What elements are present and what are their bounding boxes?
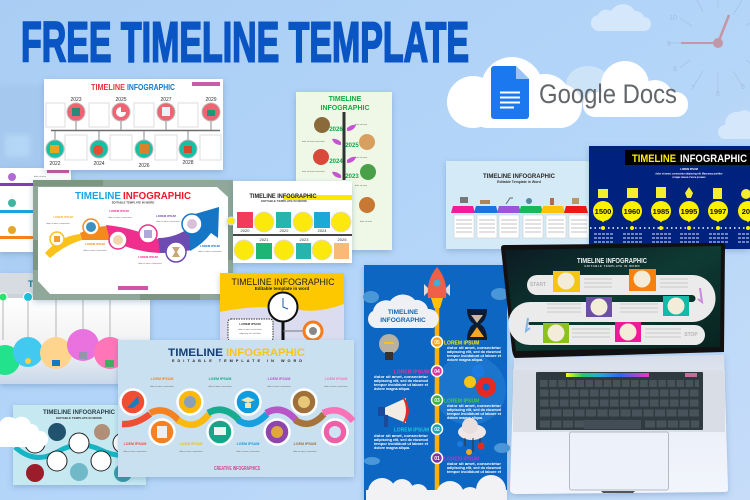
years: 2025 (345, 143, 359, 149)
dashed text box: dolor sit amet, consectetur (238, 328, 262, 331)
note boxes (454, 215, 589, 238)
years: 2029 (205, 97, 217, 103)
years: 2023 (70, 97, 82, 103)
screen cards (543, 269, 689, 343)
labels: LOREM IPSUM (444, 340, 479, 346)
intro: LOREM IPSUM (680, 168, 698, 171)
axis nodes (601, 226, 750, 230)
heading: TIMELINE INFOGRAPHIC (250, 194, 317, 200)
panel: hanging circles timeline: TI (28, 279, 36, 289)
rocket spine (435, 306, 439, 490)
blurred left patch (0, 85, 43, 270)
labels: LOREM IPSUM (394, 428, 429, 434)
copy: dolor sit amet, consectetur (179, 450, 203, 453)
copy: tempor incididunt ut labore et (447, 412, 502, 416)
laptop base (510, 355, 728, 494)
icons (460, 197, 579, 205)
heading: TIMELINE INFOGRAPHIC (483, 174, 556, 180)
labels: LOREM IPSUM (156, 214, 177, 218)
heading: TIMELINE (632, 153, 676, 165)
panel: wave timeline card: EDITABLE TEMPLATE IN WORD (56, 416, 103, 420)
copy: adipiscing elit, sed do eiusmod (447, 408, 501, 412)
labels: LOREM IPSUM (138, 255, 159, 259)
years: 2023 (300, 237, 309, 242)
stems (55, 121, 211, 141)
years: 1997 (710, 207, 726, 216)
copy: dolor sit amet, consectetur (447, 346, 502, 350)
years: 2022 (49, 161, 61, 167)
panel: timeline with coloured circles (44, 79, 223, 170)
lower nodes (150, 420, 348, 444)
bottom clouds (366, 475, 507, 500)
space bar (584, 420, 641, 429)
copy (302, 123, 372, 223)
icons (50, 107, 215, 155)
copy: dolor sit amet, consectetur (447, 404, 502, 408)
ribbon arrow (45, 207, 219, 258)
small clouds (591, 4, 750, 139)
labels: LOREM IPSUM (109, 209, 130, 213)
years: 2027 (160, 97, 172, 103)
panel: left cropped list: dolor sit amet (34, 203, 46, 206)
node numbers: 03 (434, 398, 440, 404)
copy: dolor sit amet, consectetur (198, 250, 222, 253)
panel: yellow balloon timeline: EDITABLE TEMPLATE IN WORD (261, 199, 308, 203)
laptop screen (501, 243, 725, 358)
laptop screen: EDITABLE TEMPLATE IN WORD (584, 264, 640, 268)
nodes (25, 433, 133, 471)
icon: bulb (379, 334, 399, 360)
copy (46, 216, 222, 265)
years: 2020 (241, 228, 250, 233)
clock numerals: 5 (741, 84, 745, 91)
copy: dolor sit amet, consectetur (236, 450, 260, 453)
panel: left cropped list: dolor sit amet (34, 229, 46, 232)
google docs badge (447, 57, 688, 128)
icon: google docs (491, 66, 529, 119)
labels: LOEM IPSUM (209, 377, 231, 381)
leaves (332, 125, 356, 178)
years: 2028 (182, 160, 194, 166)
years: 2024 (93, 161, 105, 167)
laptop (501, 243, 728, 494)
panel: map-framed ribbon arrow (33, 180, 233, 300)
dashed text box: LOREM IPSUM (239, 322, 261, 326)
logo (118, 286, 148, 290)
clock hands (681, 15, 729, 48)
node numbers: 04 (434, 369, 440, 375)
labels: LOEM IPSUM (268, 377, 290, 381)
copy: dolor sit amet (355, 156, 367, 159)
copy: dolor sit amet, consectetur (123, 450, 147, 453)
copy: dolor sit amet, consectetur (374, 434, 429, 438)
copy: dolor sit amet, consectetur (150, 385, 174, 388)
screen card photos (548, 270, 684, 342)
copy: dolor sit amet, consectetur (374, 375, 429, 379)
cloud over wave card (0, 417, 48, 447)
heading: TIMELINE INFOGRAPHIC (43, 409, 115, 416)
copy (374, 346, 502, 474)
years: 2024 (329, 159, 343, 165)
touch bar (566, 373, 697, 377)
copy: adipiscing elit, sed do eiusmod (374, 438, 428, 442)
labels: LOREM IPSUM (85, 242, 106, 246)
screen end labels (530, 282, 698, 338)
years: 2026 (329, 127, 343, 133)
copy: dolor sit amet, consectetur (46, 222, 70, 225)
icon: cloud network (457, 418, 486, 455)
logo: CREATIVE INFOGRAPHICS (214, 466, 260, 472)
copy: dolor sit amet consectetur (302, 170, 325, 173)
panel: word template steps (446, 161, 592, 249)
copy: dolor sit amet consectetur (302, 140, 325, 143)
panel: green vertical timeline (296, 92, 392, 250)
milestones (50, 214, 202, 262)
spine (342, 112, 346, 180)
heading: TIMELINE (329, 96, 362, 103)
clock numerals: 7 (691, 85, 695, 92)
copy: dolor sit amet, consectetur (447, 462, 502, 466)
dashed text box (228, 319, 273, 341)
decorative clock (667, 0, 750, 98)
copy: dolore magna aliqua. (447, 416, 483, 420)
panel: left cropped list (0, 168, 71, 252)
google docs wordmark: Google Docs (539, 79, 677, 109)
years: 2025 (115, 97, 127, 103)
copy: dolor sit amet, consectetur (267, 385, 291, 388)
years (49, 97, 217, 169)
screen track (518, 285, 706, 335)
clock icon (268, 292, 298, 340)
cloud (447, 57, 688, 128)
panel: hanging circles timeline (0, 273, 150, 384)
labels: LOEM IPSUM (325, 377, 347, 381)
panel: timeline with coloured circles: INFOGRAPHIC (127, 83, 175, 92)
clock numerals (667, 15, 745, 98)
years: 2021 (260, 237, 269, 242)
copy: adipiscing elit, sed do eiusmod (374, 379, 428, 383)
labels (394, 340, 479, 462)
screen end labels: STOP (684, 332, 698, 338)
panel: map-framed ribbon arrow: INFOGRAPHIC (123, 191, 191, 202)
copy: dolor sit amet, consectetur (108, 216, 132, 219)
screen copy (547, 279, 688, 337)
milestone icons (54, 219, 197, 257)
icon: gears (464, 364, 496, 397)
labels: LOREM IPSUM (200, 244, 221, 248)
copy: dolore magna aliqua. (374, 387, 410, 391)
labels: LOREM IPSUM (394, 370, 429, 376)
icon: hourglass (467, 309, 487, 340)
years: 1500 (595, 207, 611, 216)
panel: green vertical timeline: INFOGRAPHIC (320, 105, 370, 112)
years: 1985 (653, 207, 669, 216)
copy: dolor sit amet, consectetur (324, 385, 348, 388)
labels: LOREM IPSUM (444, 456, 479, 462)
labels: LOREM IPSUM (53, 215, 74, 219)
axis (233, 234, 352, 236)
clock numerals: 9 (667, 41, 671, 48)
coloured tabs (451, 206, 588, 213)
panel: navy year timeline (589, 146, 750, 249)
node numbers: 01 (434, 456, 440, 462)
keyboard (513, 370, 725, 432)
panel: rocket poster (363, 265, 510, 500)
copy: dolor sit amet, consectetur (156, 220, 180, 223)
clock numerals: 8 (673, 66, 677, 73)
labels: LOEM IPSUM (151, 377, 173, 381)
orange marker (304, 322, 322, 340)
photos (26, 423, 132, 482)
copy: dolor sit amet, consectetur (83, 249, 107, 252)
labels: LOEM IPSUM (124, 442, 146, 446)
labels: LOEM IPSUM (180, 442, 202, 446)
clock numerals: 6 (716, 91, 720, 98)
copy: adipiscing elit, sed do eiusmod (447, 350, 501, 354)
panel: wavy year timeline: EDITABLE TEMPLATE IN WORD (172, 359, 302, 363)
panel: wavy year timeline (118, 340, 354, 477)
screen end labels: START (530, 282, 546, 288)
copy: dolor sit amet, consectetur (293, 450, 317, 453)
background clouds (363, 288, 510, 465)
years: 2023 (345, 174, 359, 180)
copy: tempor incididunt ut labore et (447, 470, 502, 474)
panel: clock card (220, 273, 344, 341)
heading: TIMELINE (168, 347, 223, 359)
heading: TIMELINE INFOGRAPHIC (232, 277, 335, 288)
screen arrows (526, 288, 702, 331)
years: 1995 (681, 207, 697, 216)
upper nodes (120, 390, 316, 414)
panel: clock card: Editable template in word (255, 286, 310, 291)
copy (594, 234, 750, 242)
node icons (127, 396, 341, 438)
heading: TIMELINE (91, 83, 126, 92)
lower circles (46, 140, 197, 158)
icons (598, 187, 750, 199)
years (241, 228, 347, 242)
copy: dolor sit amet (360, 220, 372, 223)
note copy (456, 220, 587, 232)
labels: LOREM IPSUM (444, 398, 479, 404)
copy (123, 385, 348, 453)
copy: dolor sit amet, consectetur (138, 262, 162, 265)
cloud title: INFOGRAPHIC (380, 317, 426, 324)
text boxes (46, 103, 221, 160)
clock numerals: 10 (669, 15, 677, 22)
copy: dolore magna aliqua. (374, 446, 410, 450)
heading: TIMELINE (75, 191, 121, 202)
panel: map-framed ribbon arrow: EDITABLE TEMPLATE IN WORD (112, 200, 154, 204)
copy: adipiscing elit, sed do eiusmod (447, 466, 501, 470)
copy: dolor sit amet (355, 184, 367, 187)
cloud title (368, 294, 439, 328)
panel: word template steps: Editable Template in Word (497, 180, 541, 184)
labels: LOEM IPSUM (237, 442, 259, 446)
panel: wave timeline card (13, 405, 146, 485)
trackpad (570, 432, 668, 490)
years (329, 127, 359, 180)
panel: wavy year timeline: INFOGRAPHIC (226, 347, 305, 359)
wave (15, 445, 146, 457)
rocket (424, 267, 450, 308)
years (595, 207, 750, 216)
copy: dolor sit amet, consectetur (208, 385, 232, 388)
node numbers: 02 (434, 427, 440, 433)
copy: dolor sit amet (355, 123, 367, 126)
wave ribbons (122, 410, 353, 425)
upper circles (67, 103, 220, 121)
copy: dolore magna aliqua. (447, 358, 483, 362)
years: 2025 (338, 237, 347, 242)
balloons (227, 212, 351, 260)
years: 2022 (280, 228, 289, 233)
panel: navy year timeline: dolor sit amet, consectetur adipiscing elit. Maecenas porttitor (655, 172, 723, 176)
panel: left cropped list: dolor sit amet (34, 175, 46, 178)
icon: megaphone (378, 397, 409, 427)
stem (283, 330, 304, 332)
labels: LOEM IPSUM (294, 442, 316, 446)
keys (540, 384, 699, 424)
node numbers (434, 340, 440, 462)
years: 2026 (138, 163, 150, 169)
illustrations (313, 117, 376, 213)
copy: tempor incididunt ut labore et (374, 383, 429, 387)
labels (53, 209, 221, 259)
squares (237, 212, 349, 259)
years: 2024 (318, 228, 327, 233)
panel: navy year timeline: congue massa. Fusce posuere (672, 177, 706, 179)
axis (51, 130, 220, 132)
screen heading: TIMELINE INFOGRAPHIC (577, 256, 647, 265)
years: 1960 (624, 207, 640, 216)
dotted axis (590, 227, 750, 229)
year pins (593, 201, 750, 222)
panel: yellow balloon timeline (227, 181, 352, 263)
copy: tempor incididunt ut labore et (374, 442, 429, 446)
cloud title: TIMELINE (388, 309, 419, 316)
labels (124, 377, 347, 446)
copy: tempor incididunt ut labore et (447, 354, 502, 358)
year nodes (432, 336, 442, 464)
node numbers: 05 (434, 340, 440, 346)
dashed text box: adipiscing elit, sed diam (239, 332, 261, 335)
